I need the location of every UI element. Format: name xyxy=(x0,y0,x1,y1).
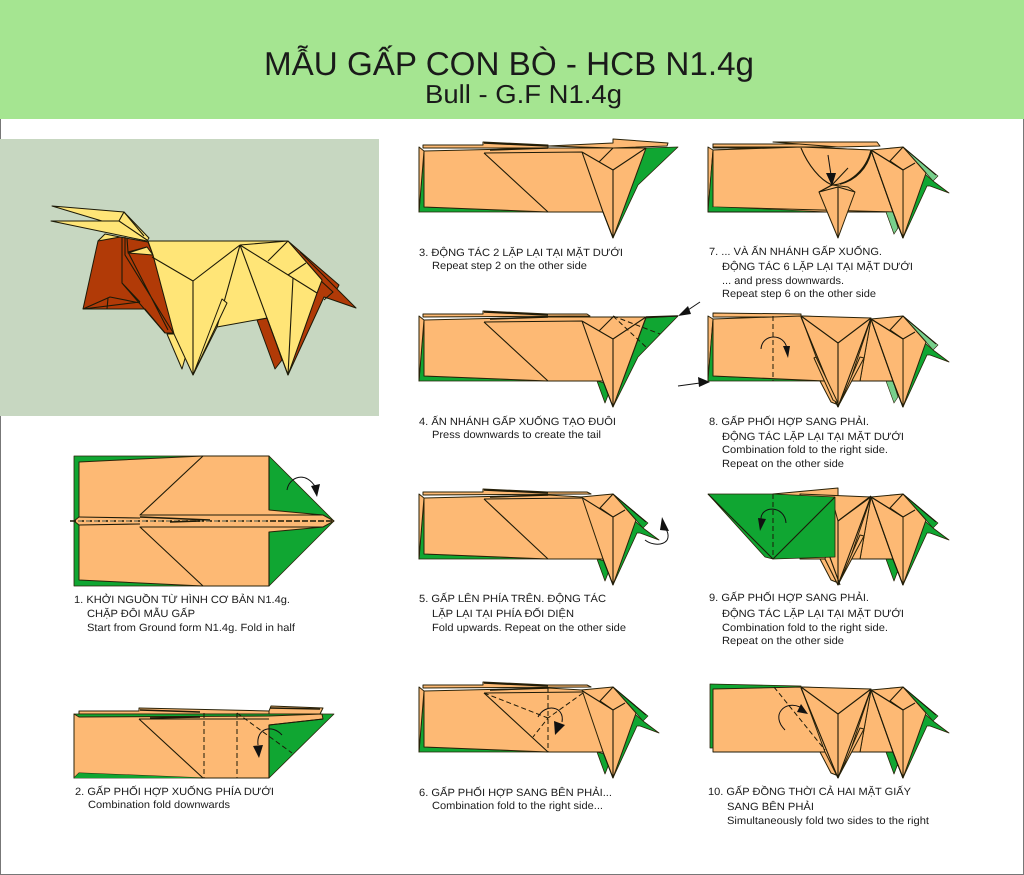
arrow: rotate left xyxy=(758,509,786,531)
caption step 8 xyxy=(709,415,904,470)
caption step 5: Fold upwards. Repeat on the other side xyxy=(432,622,626,634)
caption step 4: 4. ẤN NHÁNH GẤP XUỐNG TẠO ĐUÔI xyxy=(419,415,616,428)
caption step 7: ... and press downwards. xyxy=(722,275,844,287)
arrow: fold in half xyxy=(287,477,320,497)
caption step 6: 6. GẤP PHỐI HỢP SANG BÊN PHẢI... xyxy=(419,786,612,799)
header banner xyxy=(0,0,1024,119)
caption step 9: Combination fold to the right side. xyxy=(722,622,888,634)
caption step 6 xyxy=(419,786,612,812)
caption step 1: 1. KHỞI NGUỒN TỪ HÌNH CƠ BẢN N1.4g. xyxy=(74,593,290,606)
arrow: press down xyxy=(826,155,836,186)
panel: finished bull xyxy=(0,139,379,416)
diagram step 2 xyxy=(74,706,334,778)
caption step 3: 3. ĐỘNG TÁC 2 LẶP LẠI TẠI MẶT DƯỚI xyxy=(419,246,623,259)
arrow: fold to right xyxy=(779,704,808,730)
caption step 3: Repeat step 2 on the other side xyxy=(432,260,587,272)
caption step 5: LẶP LẠI TẠI PHÍA ĐỐI DIỆN xyxy=(432,607,574,620)
caption step 8: ĐỘNG TÁC LẶP LẠI TẠI MẶT DƯỚI xyxy=(722,430,904,443)
caption step 10: Simultaneously fold two sides to the right xyxy=(727,815,929,827)
caption step 8: Repeat on the other side xyxy=(722,458,844,470)
caption step 1: Start from Ground form N1.4g. Fold in half xyxy=(87,622,295,634)
diagram step 10 xyxy=(710,684,949,778)
diagram step 6 xyxy=(419,682,659,778)
subtitle: Bull - G.F N1.4g xyxy=(425,79,622,109)
caption step 9: 9. GẤP PHỐI HỢP SANG PHẢI. xyxy=(709,591,869,604)
caption step 2: 2. GẤP PHỐI HỢP XUỐNG PHÍA DƯỚI xyxy=(75,785,274,798)
caption step 7 xyxy=(709,245,913,300)
diagram step 5 xyxy=(419,489,669,585)
caption step 9: Repeat on the other side xyxy=(722,635,844,647)
caption step 1 xyxy=(74,593,295,634)
caption step 7: Repeat step 6 on the other side xyxy=(722,288,876,300)
caption step 4 xyxy=(419,415,616,441)
caption step 8: Combination fold to the right side. xyxy=(722,444,888,456)
icon: bull model xyxy=(51,206,356,375)
caption step 10: SANG BÊN PHẢI xyxy=(727,800,814,813)
caption step 3 xyxy=(419,246,623,272)
caption step 4: Press downwards to create the tail xyxy=(432,429,601,441)
caption step 9: ĐỘNG TÁC LẶP LẠI TẠI MẶT DƯỚI xyxy=(722,607,904,620)
caption step 5: 5. GẤP LÊN PHÍA TRÊN. ĐỘNG TÁC xyxy=(419,592,606,605)
caption step 10 xyxy=(708,785,929,827)
caption step 1: CHẶP ĐÔI MẪU GẤP xyxy=(87,607,195,620)
arrow: rotate right xyxy=(761,337,790,358)
arrow: fold down xyxy=(253,729,282,758)
title: MẪU GẤP CON BÒ - HCB N1.4g xyxy=(264,45,754,82)
caption step 6: Combination fold to the right side... xyxy=(432,800,603,812)
arrow: rotate right xyxy=(538,708,565,735)
diagram step 9 xyxy=(708,488,949,585)
arrow: press lower xyxy=(678,377,710,387)
arrow: press tail xyxy=(678,302,700,316)
diagram step 1 xyxy=(70,456,334,586)
diagram step 3 xyxy=(419,139,678,238)
diagram step 4 xyxy=(419,302,710,407)
diagram step 7 xyxy=(708,142,949,238)
caption step 2 xyxy=(75,785,274,811)
caption step 8: 8. GẤP PHỐI HỢP SANG PHẢI. xyxy=(709,415,869,428)
arrow: fold upward xyxy=(645,517,669,544)
caption step 5 xyxy=(419,592,626,634)
caption step 7: ĐỘNG TÁC 6 LẶP LẠI TẠI MẶT DƯỚI xyxy=(722,260,913,273)
diagram step 8 xyxy=(708,313,949,407)
caption step 2: Combination fold downwards xyxy=(88,799,230,811)
caption step 10: 10. GẤP ĐỒNG THỜI CẢ HAI MẶT GIẤY xyxy=(708,785,911,798)
caption step 9 xyxy=(709,591,904,647)
caption step 7: 7. ... VÀ ẤN NHÁNH GẤP XUỐNG. xyxy=(709,245,882,258)
